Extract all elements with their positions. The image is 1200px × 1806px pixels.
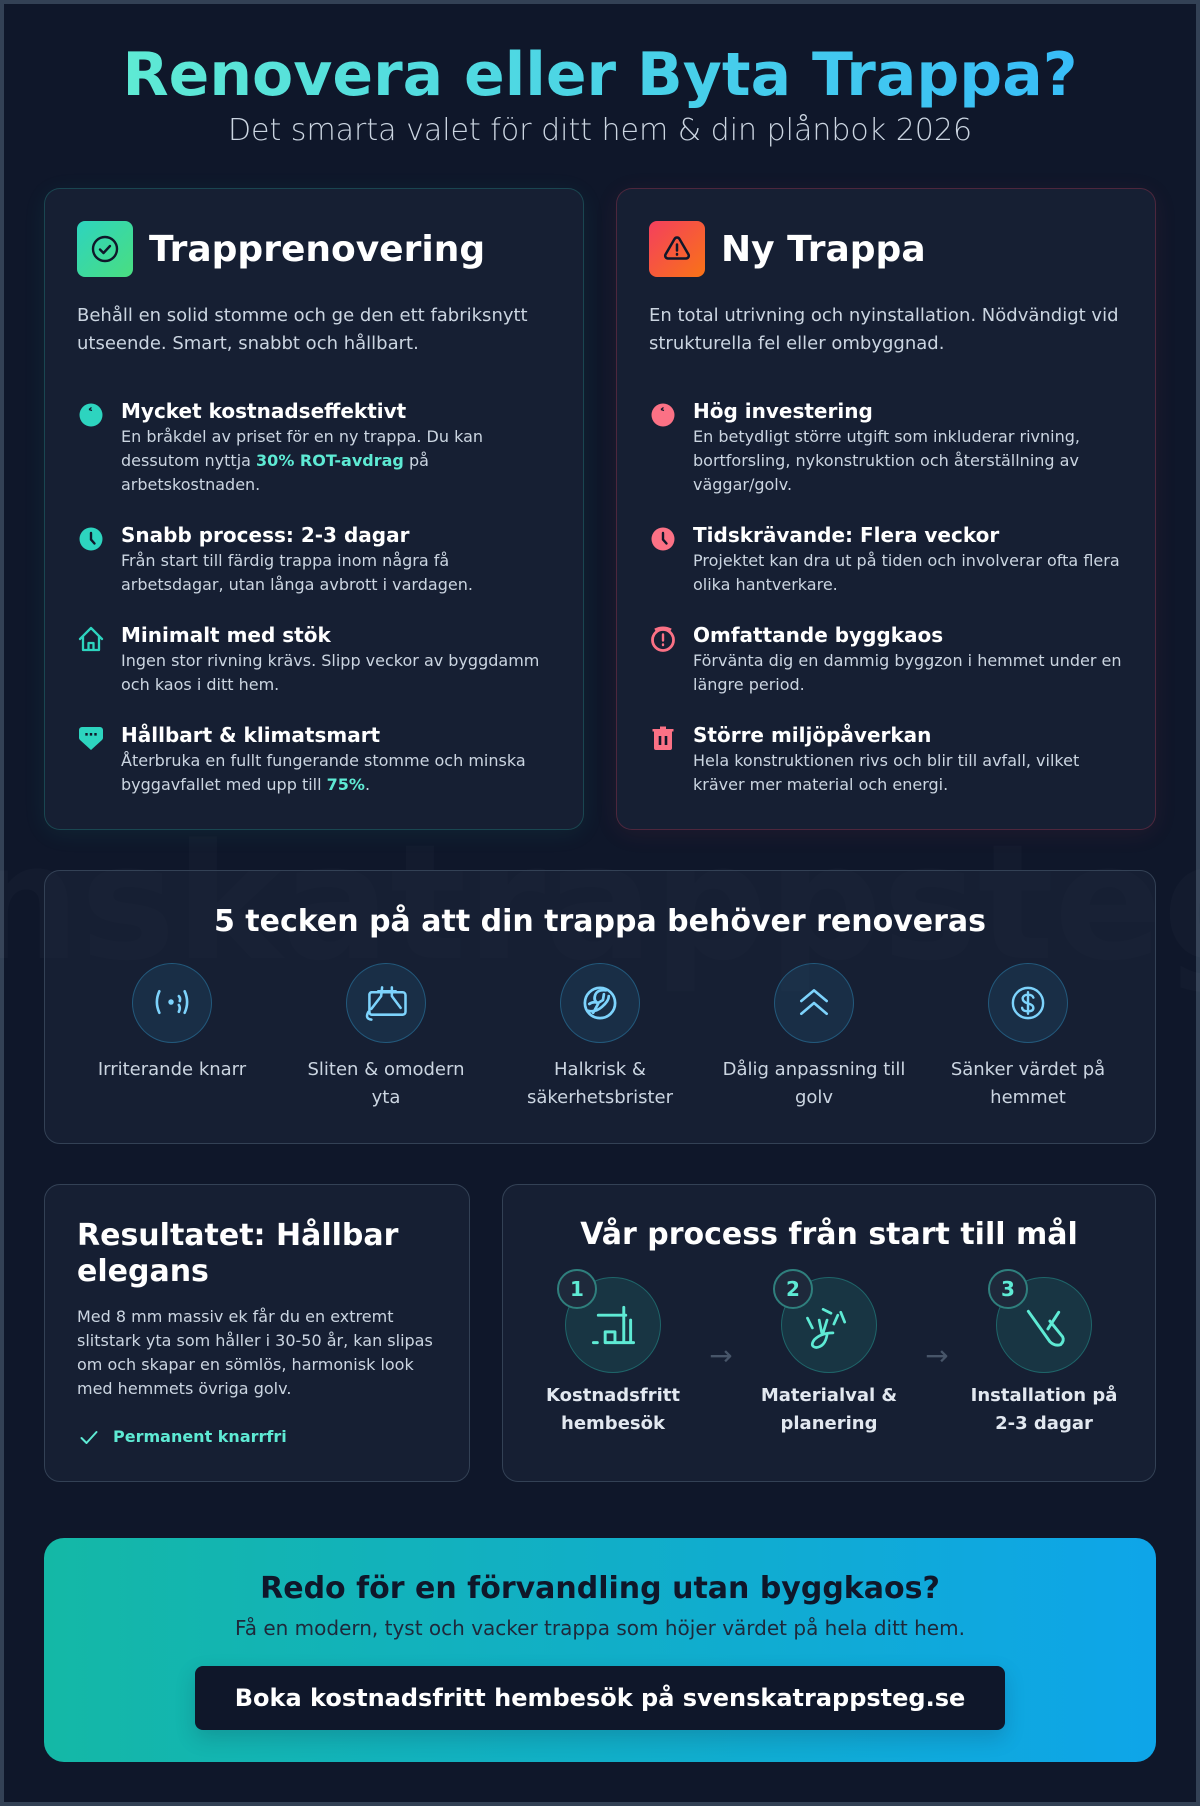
sign: värde [951, 963, 1105, 1108]
sign: sliten yta [308, 963, 464, 1108]
icon: clock [652, 528, 674, 550]
item: snabb process [121, 523, 473, 594]
item: hållbart: byggavfallet med upp till 75%. [121, 775, 370, 794]
badge: 2 [773, 1269, 813, 1309]
item: miljöpåverkan: Större miljöpåverkan [693, 723, 931, 747]
icon: double chevron [774, 963, 854, 1043]
step 3 [971, 1269, 1117, 1434]
intro text [649, 305, 1119, 354]
badge: 3: 3 [1001, 1277, 1015, 1301]
item: kostnadseffektivt: dessutom nyttja 30% ROT-avdrag på [121, 451, 429, 470]
item: tidskrävande: Projektet kan dra ut på tiden och involverar ofta flera [693, 551, 1120, 570]
item: miljöpåverkan [693, 723, 1079, 794]
step 2 [761, 1269, 897, 1434]
icon: house [78, 626, 104, 652]
body text: slitstark yta som håller i 30-50 år, kan slipas [77, 1331, 433, 1350]
intro text [77, 305, 528, 354]
badge: 1 [557, 1269, 597, 1309]
item: hög investering: En betydligt större utgift som inkluderar rivning, [693, 427, 1080, 446]
heading: Vår process från start till mål [580, 1217, 1078, 1252]
item: tidskrävande [693, 523, 1120, 594]
label: Sliten & omodern [308, 1059, 464, 1080]
item: snabb process: Snabb process: 2-3 dagar [121, 523, 409, 547]
label: Dålig anpassning till [723, 1059, 905, 1080]
icon: coin [652, 404, 674, 426]
item: byggkaos: Förvänta dig en dammig byggzon i hemmet under en [693, 651, 1121, 670]
item: minimalt stök: Ingen stor rivning krävs. Slipp veckor av byggdamm [121, 651, 539, 670]
badge: 2: 2 [786, 1277, 800, 1301]
label [951, 1059, 1105, 1108]
item: tidskrävande: Tidskrävande: Flera veckor [693, 523, 999, 547]
heading: Redo för en förvandling utan byggkaos? [260, 1571, 940, 1606]
panel: trapprenovering [44, 188, 584, 830]
heading [77, 1218, 398, 1289]
arrow: → [709, 1339, 733, 1372]
arrow: → [925, 1339, 949, 1372]
label: Sänker värdet på [951, 1059, 1105, 1080]
label: Irriterande knarr [98, 1059, 246, 1080]
item: byggkaos: Omfattande byggkaos [693, 623, 943, 647]
heading: 5 tecken på att din trappa behöver renoveras [214, 904, 986, 939]
label: golv [795, 1087, 833, 1108]
item: hållbart: Hållbart & klimatsmart [121, 723, 380, 747]
item: kostnadseffektivt [121, 399, 483, 494]
label: Halkrisk & [554, 1059, 646, 1080]
panel: call to action [44, 1538, 1156, 1762]
title: Renovera eller Byta Trappa? [122, 40, 1078, 110]
sign: halkrisk [527, 963, 673, 1108]
item: miljöpåverkan: kräver mer material och energi. [693, 775, 948, 794]
intro text: strukturella fel eller ombyggnad. [649, 333, 944, 354]
subtitle: Det smarta valet för ditt hem & din plånbok 2026 [228, 113, 972, 148]
button [195, 1666, 1005, 1730]
intro text: Behåll en solid stomme och ge den ett fabriksnytt [77, 305, 528, 326]
icon: warning badge [649, 221, 705, 277]
item: byggkaos: längre period. [693, 675, 805, 694]
icon: dollar [988, 963, 1068, 1043]
step 1 [546, 1269, 680, 1434]
label: Materialval & [761, 1385, 897, 1406]
item: kostnadseffektivt: arbetskostnaden. [121, 475, 260, 494]
item: minimalt stök: och kaos i ditt hem. [121, 675, 279, 694]
item: byggkaos [693, 623, 1121, 694]
badge: 3 [988, 1269, 1028, 1309]
item: kostnadseffektivt: Mycket kostnadseffektivt [121, 399, 406, 423]
label [761, 1385, 897, 1434]
item: snabb process: Från start till färdig trappa inom några få [121, 551, 449, 570]
feature label: Permanent knarrfri [113, 1427, 287, 1446]
panel: resultat [44, 1184, 470, 1482]
body text: med hemmets övriga golv. [77, 1379, 291, 1398]
label: säkerhetsbrister [527, 1087, 673, 1108]
heading: Trapprenovering [149, 229, 485, 270]
body text: om och skapar en sömlös, harmonisk look [77, 1355, 414, 1374]
sign: golv [723, 963, 905, 1108]
button: Boka kostnadsfritt hembesök på svenskatrappsteg.se [235, 1684, 965, 1712]
icon: alert [651, 626, 675, 652]
label: planering [780, 1413, 877, 1434]
item: hög investering: bortforsling, nykonstruktion och återställning av [693, 451, 1079, 470]
label: yta [372, 1087, 400, 1108]
icon: trash [652, 726, 674, 750]
label [546, 1385, 680, 1434]
icon: worn surface [346, 963, 426, 1043]
icon: clock [80, 528, 102, 550]
heading: elegans [77, 1254, 209, 1289]
item: tidskrävande: olika hantverkare. [693, 575, 838, 594]
label: 2-3 dagar [995, 1413, 1093, 1434]
body text [77, 1307, 433, 1398]
item: hög investering [693, 399, 1080, 494]
icon: creak [132, 963, 212, 1043]
icon: coin [80, 404, 102, 426]
label: Installation på [971, 1385, 1117, 1406]
label [971, 1385, 1117, 1434]
panel: ny trappa [616, 188, 1156, 830]
item: hög investering: väggar/golv. [693, 475, 792, 494]
item: minimalt stök [121, 623, 539, 694]
label: hembesök [561, 1413, 665, 1434]
label [308, 1059, 464, 1108]
heading: Ny Trappa [721, 229, 926, 270]
panel: 5 tecken [44, 870, 1156, 1144]
icon: slip hazard [560, 963, 640, 1043]
item: minimalt stök: Minimalt med stök [121, 623, 331, 647]
item: miljöpåverkan: Hela konstruktionen rivs och blir till avfall, vilket [693, 751, 1079, 770]
panel: process [502, 1184, 1156, 1482]
badge: 1: 1 [570, 1277, 584, 1301]
sign: knarr [98, 963, 246, 1080]
intro text: En total utrivning och nyinstallation. Nödvändigt vid [649, 305, 1119, 326]
label: Kostnadsfritt [546, 1385, 680, 1406]
item: hög investering: Hög investering [693, 399, 873, 423]
icon: material [781, 1277, 877, 1373]
body text: Med 8 mm massiv ek får du en extremt [77, 1307, 393, 1326]
heading: Resultatet: Hållbar [77, 1218, 398, 1253]
item: snabb process: arbetsdagar, utan långa avbrott i vardagen. [121, 575, 473, 594]
subtext: Få en modern, tyst och vacker trappa som höjer värdet på hela ditt hem. [235, 1616, 965, 1640]
icon: tool [996, 1277, 1092, 1373]
intro text: utseende. Smart, snabbt och hållbart. [77, 333, 419, 354]
item: hållbart: Återbruka en fullt fungerande stomme och minska [121, 751, 526, 770]
icon: check [80, 1431, 98, 1444]
label [527, 1059, 673, 1108]
item: kostnadseffektivt: En bråkdel av priset för en ny trappa. Du kan [121, 427, 483, 446]
label: hemmet [990, 1087, 1066, 1108]
icon: check badge [77, 221, 133, 277]
icon: measuring [565, 1277, 661, 1373]
label [723, 1059, 905, 1108]
item: hållbart [121, 723, 526, 794]
icon: leaf shield [79, 727, 103, 750]
